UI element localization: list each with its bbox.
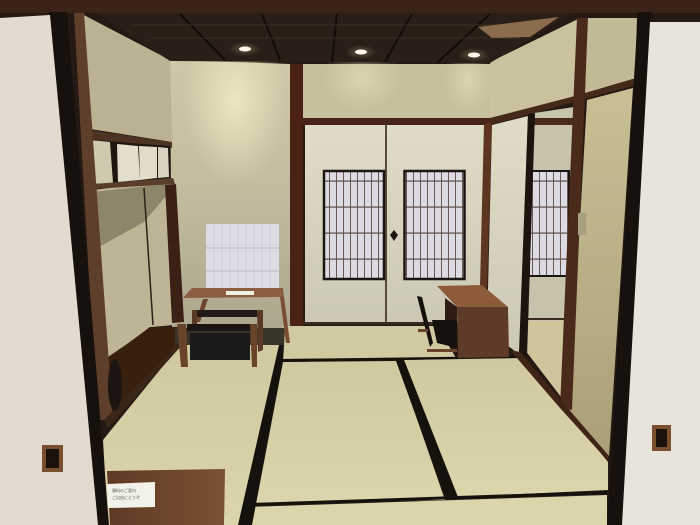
- left alcove edge: [104, 343, 182, 428]
- desk right: [437, 285, 509, 358]
- tatami borders: [238, 345, 607, 525]
- right foreground sliding door: [622, 22, 700, 525]
- top beam: [0, 0, 700, 13]
- dark panel post: [519, 113, 535, 357]
- door pull: [390, 230, 398, 241]
- right column: [560, 18, 588, 410]
- back wall left: [170, 15, 291, 328]
- reflected window: [529, 171, 569, 276]
- center tatami: [255, 361, 445, 503]
- back wall upper: [301, 44, 492, 120]
- right post back: [480, 122, 492, 288]
- left tatami: [103, 345, 282, 525]
- alcove post: [165, 184, 184, 323]
- paper on table: [107, 482, 155, 508]
- paper on table: 資料のご案内: [112, 487, 136, 493]
- ceiling lights: [229, 42, 490, 62]
- screen panel white: [206, 224, 279, 288]
- desk left: [183, 288, 290, 343]
- left alcove lower wall: [93, 180, 174, 357]
- left post: [74, 13, 113, 420]
- floor track: [510, 350, 608, 461]
- back post: [290, 64, 303, 326]
- floor cushion dark: [108, 359, 122, 411]
- switch: [578, 213, 586, 235]
- reflected opening: [525, 107, 574, 400]
- shoji window left: [324, 171, 384, 279]
- shelf cupboard: [89, 130, 175, 189]
- left wall upper: [80, 13, 172, 142]
- foreground table: [107, 469, 225, 525]
- left foreground door frame: [49, 12, 109, 525]
- door pull right: [652, 425, 671, 451]
- chair right: [417, 296, 457, 352]
- paper on table: ご自由にどうぞ: [112, 494, 140, 500]
- sliding panel right: [487, 116, 528, 355]
- right tatami: [404, 357, 608, 497]
- shoji window right: [404, 171, 464, 279]
- back tatami: [280, 326, 456, 359]
- legless chairs left: [177, 310, 263, 367]
- left foreground sliding door: [0, 15, 98, 525]
- fusuma sliding doors: [303, 118, 490, 324]
- right wall upper: [490, 18, 637, 125]
- floor shadow behind chairs: [175, 328, 285, 346]
- right wall panel: [569, 88, 633, 456]
- alcove floor: [108, 327, 180, 418]
- door pull left: [42, 445, 63, 472]
- bottom tatami: [245, 495, 607, 525]
- air vent: [478, 17, 559, 38]
- ceiling: [95, 12, 575, 63]
- right foreground door frame: [607, 12, 652, 525]
